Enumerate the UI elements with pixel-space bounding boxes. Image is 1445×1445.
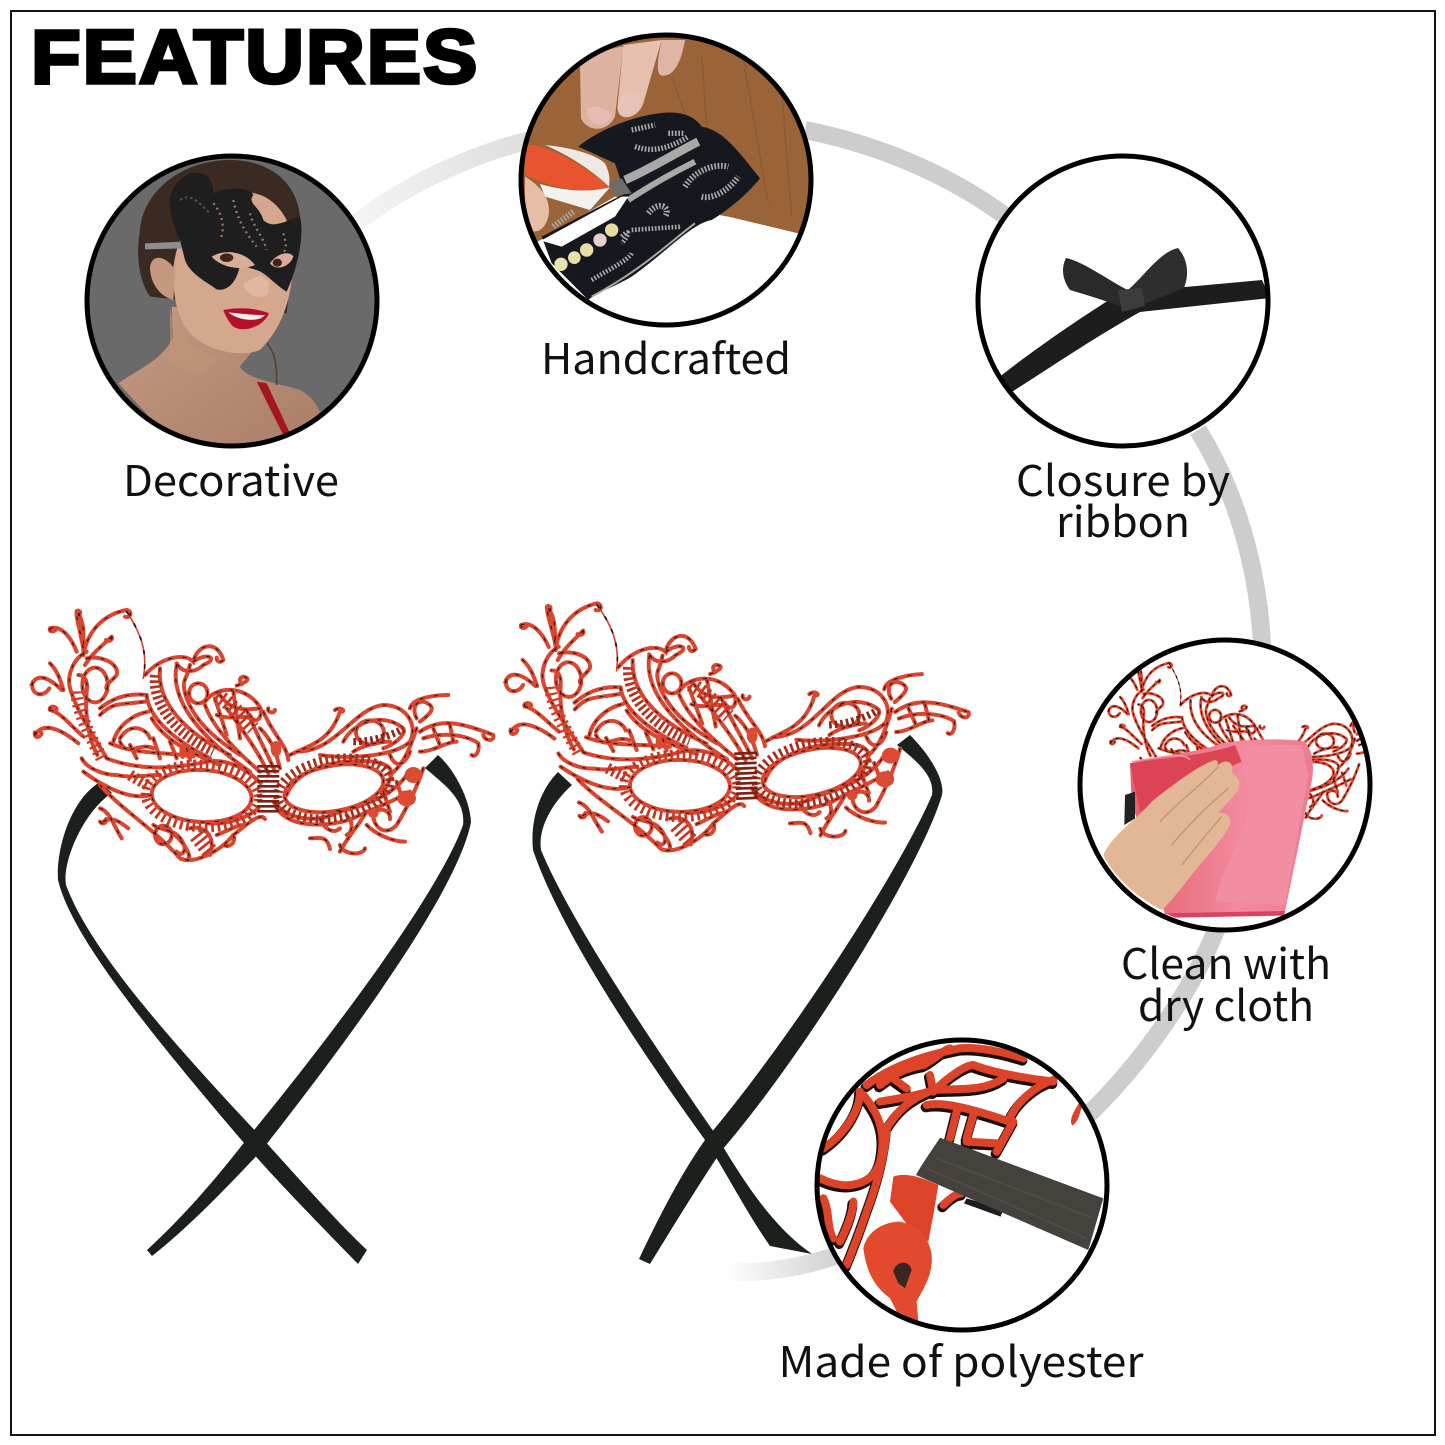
- label: Handcrafted: [541, 326, 791, 387]
- label: Decorative: [123, 448, 339, 509]
- product: right lace mask with ribbons: [502, 587, 974, 1264]
- label: [1121, 931, 1331, 1034]
- feature: made of polyester: [778, 1040, 1144, 1390]
- circle outline: [87, 156, 377, 446]
- photo: hand wiping mask with pink cloth: [1103, 645, 1364, 918]
- label: Clean with: [1121, 931, 1331, 992]
- ribbons: [532, 735, 942, 1264]
- photo: black ribbon bow: [1001, 210, 1266, 392]
- circle outline: [1080, 640, 1370, 930]
- product: left lace mask with ribbons: [32, 610, 493, 1264]
- label: Closure by: [1016, 448, 1230, 509]
- feature: decorative: [85, 155, 380, 509]
- feature: clean with dry cloth: [1078, 640, 1404, 1034]
- photo: close-up of red lace and ribbon: [815, 1040, 1110, 1335]
- ribbons: [58, 755, 471, 1264]
- lace: [32, 610, 493, 860]
- circle outline: [521, 35, 811, 325]
- title: FEATURES: [31, 14, 477, 99]
- label: dry cloth: [1138, 973, 1314, 1034]
- label: ribbon: [1056, 489, 1190, 550]
- photo: woman wearing black lace mask: [85, 155, 380, 450]
- circle outline: [978, 156, 1268, 446]
- connecting arc: [358, 130, 1262, 1272]
- label: Made of polyester: [778, 1329, 1144, 1390]
- feature: handcrafted: [520, 35, 815, 387]
- label: [1016, 448, 1230, 550]
- circle outline: [817, 1040, 1107, 1330]
- feature: closure by ribbon: [975, 155, 1270, 550]
- lace: [502, 587, 974, 857]
- photo: gluing lace by hand: [524, 38, 808, 300]
